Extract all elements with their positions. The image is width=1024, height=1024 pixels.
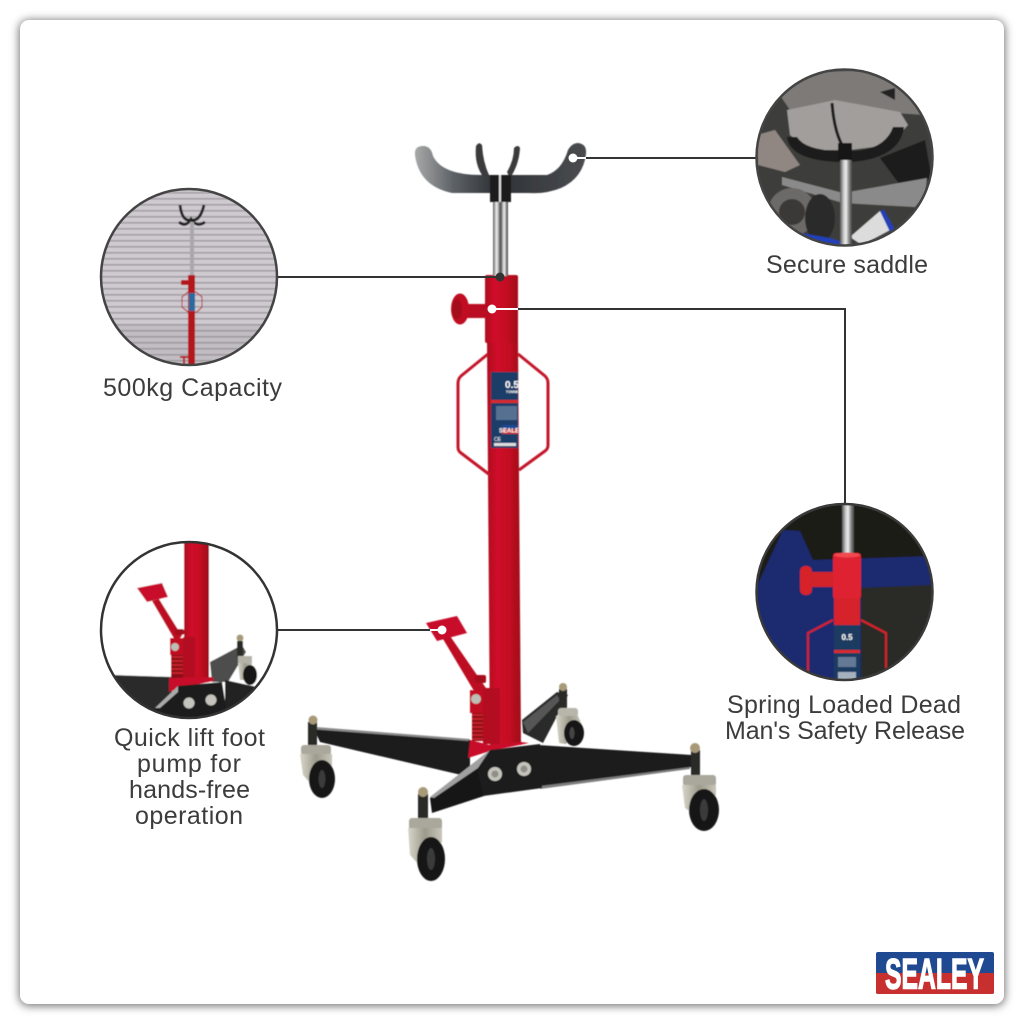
right caster xyxy=(682,743,719,831)
caption: spring loaded safety release: Spring Loaded Dead xyxy=(727,691,961,719)
product label: TONNE xyxy=(506,390,519,394)
hexagonal handle xyxy=(458,354,548,475)
release knob xyxy=(451,294,488,324)
base plate with bolts xyxy=(478,744,542,796)
red base flange xyxy=(468,740,529,758)
caption: 500kg capacity: 500kg Capacity xyxy=(103,374,282,402)
product label: 0.5 xyxy=(505,380,519,391)
caption: quick lift foot pump: Quick lift foot xyxy=(114,724,265,752)
front caster xyxy=(408,787,445,881)
left caster xyxy=(300,716,335,798)
left base arm xyxy=(313,727,470,777)
right base arm xyxy=(538,745,692,789)
caption: secure saddle: Secure saddle xyxy=(766,251,928,279)
circle photo: dead man's safety release xyxy=(755,502,935,682)
caption: quick lift foot pump: hands-free xyxy=(129,776,250,804)
product label: SEALEY xyxy=(499,428,523,434)
product label: CE xyxy=(494,437,502,443)
circle photo: full jack against shutter xyxy=(100,188,280,368)
caption: quick lift foot pump: operation xyxy=(135,802,243,830)
jack product illustration xyxy=(300,143,719,881)
foot pump xyxy=(426,616,500,744)
product label xyxy=(491,372,523,448)
circle photo: saddle under vehicle xyxy=(755,68,935,248)
circle photo: quick lift foot pump xyxy=(100,540,280,720)
leader: foot pump xyxy=(277,626,446,634)
saddle xyxy=(415,143,586,202)
rear base arm xyxy=(522,692,568,743)
column lower tube xyxy=(487,340,521,745)
leader: safety release xyxy=(488,304,845,505)
front base arm xyxy=(430,750,490,813)
caption: quick lift foot pump xyxy=(114,724,265,830)
caption: spring loaded safety release xyxy=(725,691,965,745)
chrome lift rods xyxy=(493,200,508,276)
caption: spring loaded safety release: Man's Safety Release xyxy=(725,717,965,745)
leader: secure saddle xyxy=(568,154,758,162)
caption: quick lift foot pump: pump for xyxy=(137,750,241,778)
leader: 500kg capacity xyxy=(277,272,504,282)
infographic canvas xyxy=(100,68,994,994)
column top collar xyxy=(485,275,518,343)
circle photo: dead man's safety release: 0.5 xyxy=(841,633,853,642)
rear caster xyxy=(556,683,584,746)
